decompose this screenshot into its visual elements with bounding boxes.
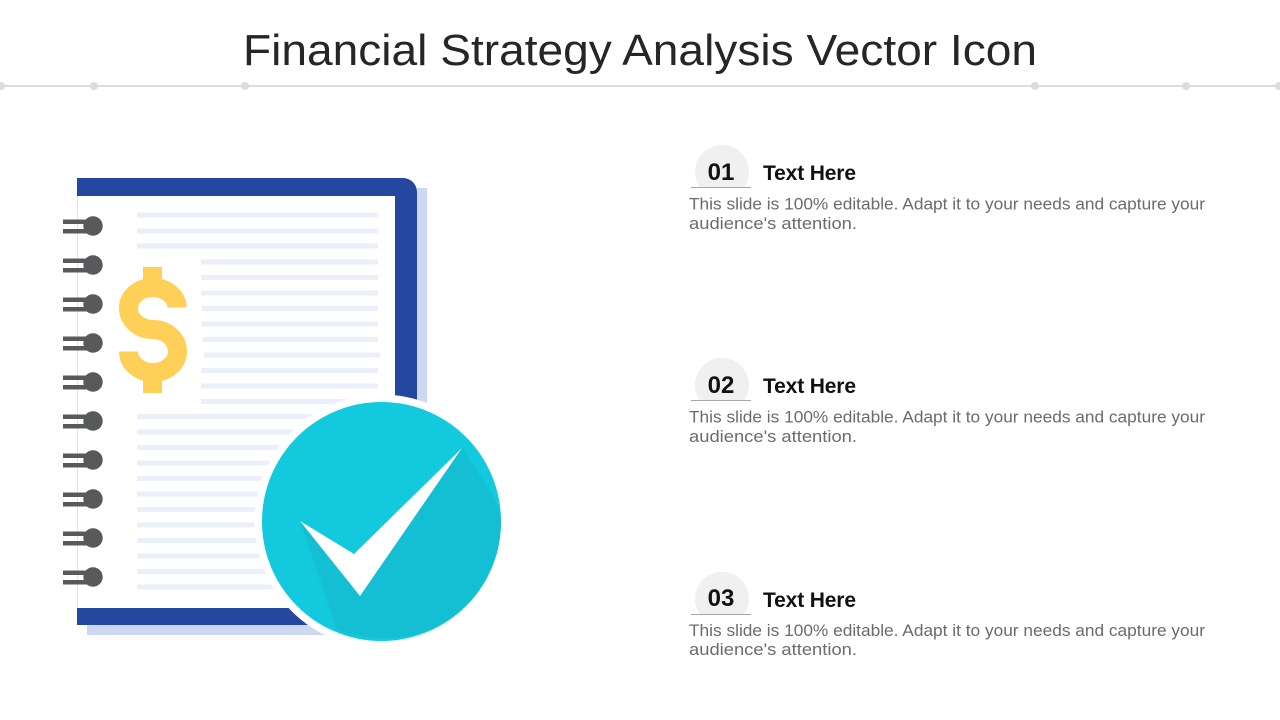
icon: dollar sign [128,267,178,393]
body text 03: audience's attention. [689,640,857,659]
icon: spiral binding [63,216,103,587]
body text 03: This slide is 100% editable. Adapt it to your needs and capture your [689,621,1205,640]
badge check shadow [300,448,501,638]
body text 02: audience's attention. [689,427,857,446]
header rule with dots [0,82,1280,90]
body text 03 [689,621,1205,659]
page edge [77,196,78,608]
body text 01: audience's attention. [689,214,857,233]
number badge 03: 03 [708,585,734,612]
text lines: lower block [137,414,378,590]
number badge 01 [691,145,751,188]
body text 02 [689,408,1205,446]
number badge 03 [691,572,751,615]
notebook cover [77,178,417,625]
heading 01: Text Here [763,162,856,185]
number badge 01: 01 [708,159,734,186]
icon: notebook with check badge [63,178,508,648]
badge white ring [254,394,508,648]
body text 01: This slide is 100% editable. Adapt it to your needs and capture your [689,194,1205,214]
number badge 02: 02 [708,372,734,399]
notebook shadow [87,188,427,635]
body text 02: This slide is 100% editable. Adapt it to your needs and capture your [689,408,1205,426]
item 02 [689,358,1205,446]
heading 02: Text Here [763,375,856,398]
badge circle [262,402,501,641]
text lines: beside dollar [201,260,380,404]
heading 03: Text Here [763,589,856,612]
text lines: top block [137,212,378,248]
icon: check mark [300,448,462,596]
notebook page [77,196,395,608]
body text 01 [689,194,1205,233]
title: Financial Strategy Analysis Vector Icon [243,26,1037,75]
item 01 [689,145,1205,233]
item 03 [689,572,1205,659]
number badge 02 [691,358,751,401]
